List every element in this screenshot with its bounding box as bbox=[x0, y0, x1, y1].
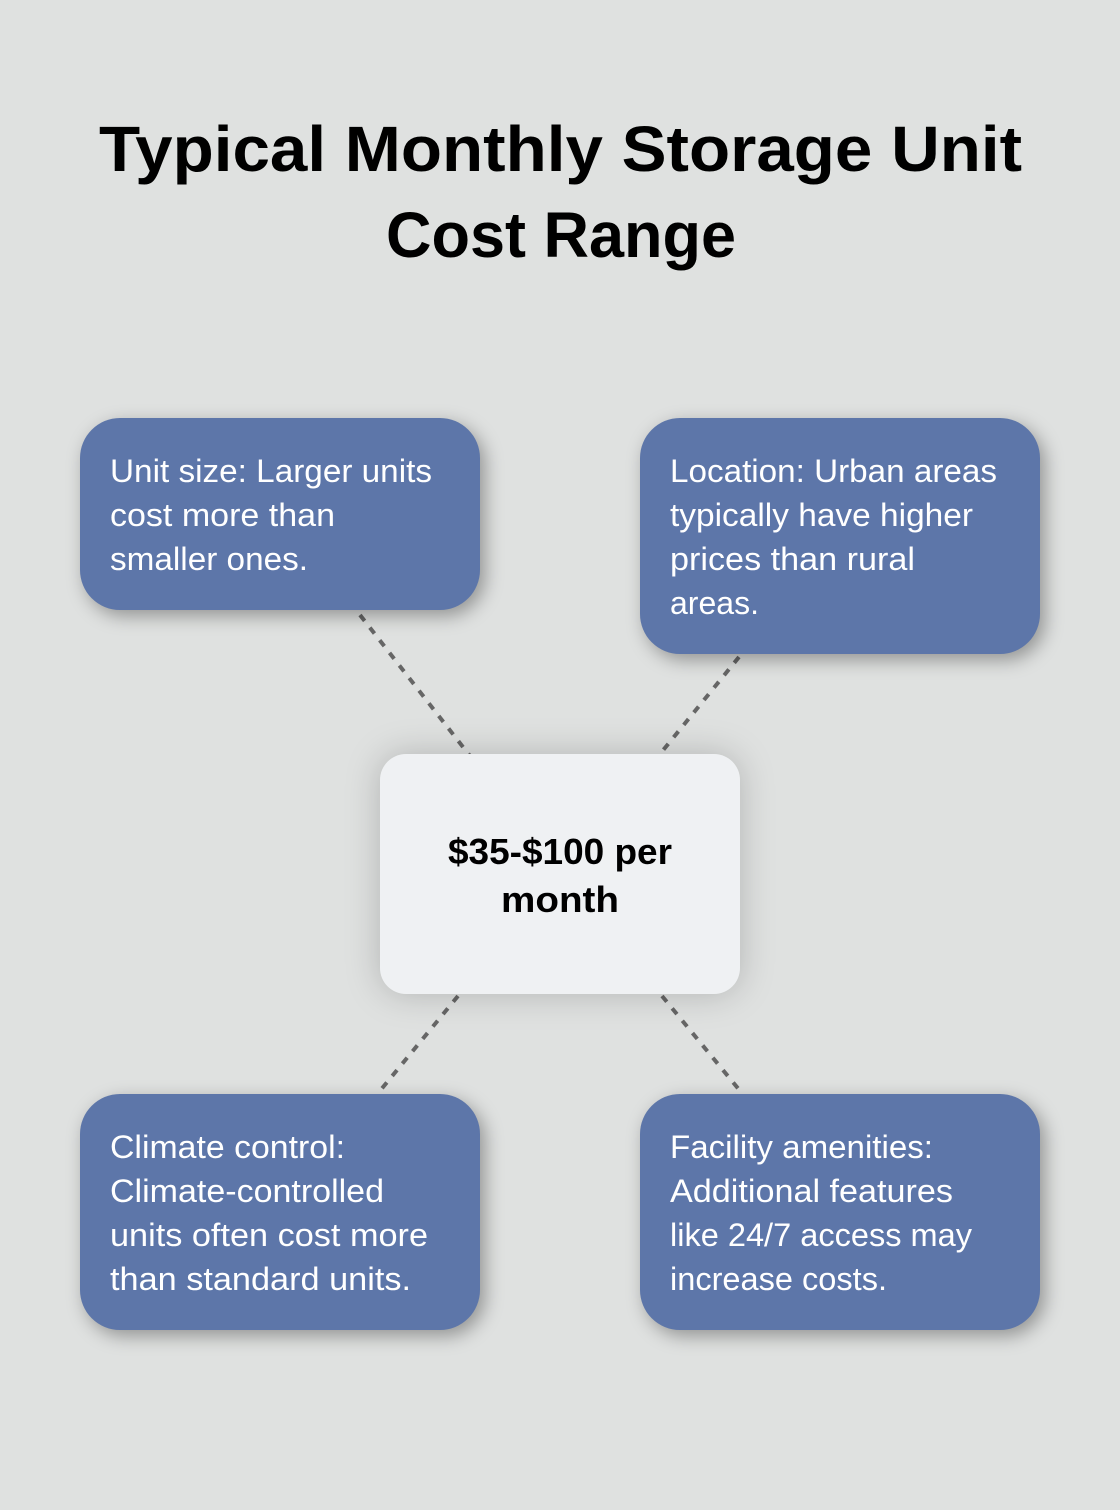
connector: facility amenities to center bbox=[662, 996, 741, 1092]
panel: climate control: Climate-controlled bbox=[110, 1173, 384, 1209]
panel: center price range bbox=[380, 754, 740, 994]
panel: unit size: smaller ones. bbox=[110, 541, 308, 577]
panel: location: areas. bbox=[670, 585, 759, 621]
panel: location: typically have higher bbox=[670, 497, 973, 533]
panel: facility amenities bbox=[640, 1094, 1040, 1330]
panel: unit size bbox=[80, 418, 480, 610]
panel: facility amenities: like 24/7 access may bbox=[670, 1217, 972, 1253]
panel: center price range: month bbox=[501, 879, 619, 920]
connector: unit size to center bbox=[360, 615, 470, 756]
title: Typical Monthly Storage Unit bbox=[99, 113, 1022, 185]
panel: climate control: Climate control: bbox=[110, 1129, 345, 1165]
panel: unit size: cost more than bbox=[110, 497, 335, 533]
panel: climate control: than standard units. bbox=[110, 1261, 411, 1297]
panel: climate control bbox=[80, 1094, 480, 1330]
panel: location: prices than rural bbox=[670, 541, 915, 577]
panel: center price range: $35-$100 per bbox=[448, 831, 672, 872]
title: Cost Range bbox=[386, 199, 736, 271]
panel: location bbox=[640, 418, 1040, 654]
connector: climate control to center bbox=[379, 996, 458, 1092]
panel: facility amenities: Facility amenities: bbox=[670, 1129, 933, 1165]
panel: climate control: units often cost more bbox=[110, 1217, 428, 1253]
panel: facility amenities: Additional features bbox=[670, 1173, 953, 1209]
panel: unit size: Unit size: Larger units bbox=[110, 453, 432, 489]
panel: facility amenities: increase costs. bbox=[670, 1261, 887, 1297]
panel: location: Location: Urban areas bbox=[670, 453, 997, 489]
title bbox=[99, 113, 1022, 271]
connector: location to center bbox=[660, 657, 739, 754]
